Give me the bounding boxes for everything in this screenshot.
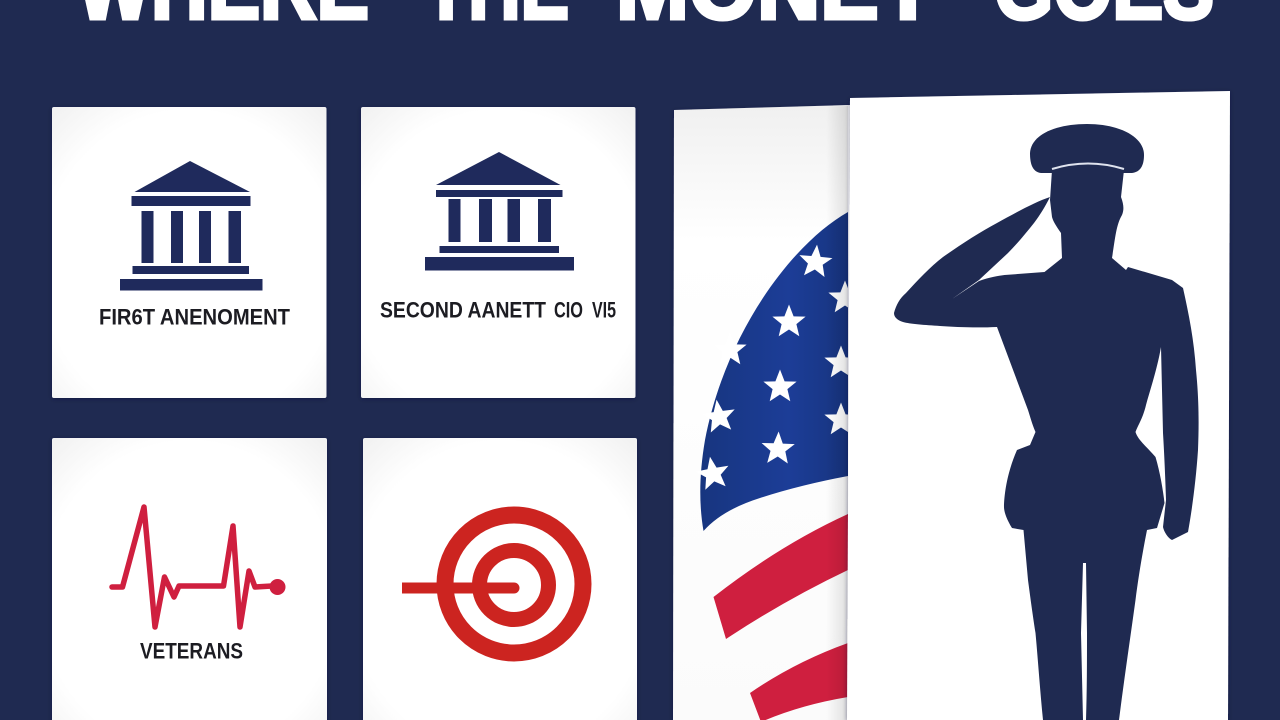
panel: soldier [847,91,1230,720]
icon: heartbeat [112,507,286,627]
flag stars [700,244,848,490]
panel: flag [673,105,862,720]
panel: target [363,438,637,720]
label: second amendment: SECOND AANETT [380,298,546,322]
flag canton [700,212,848,531]
icon: saluting soldier silhouette [894,124,1199,720]
label: second amendment: CIO [554,298,583,322]
soldier cap [1030,124,1144,173]
icon: target [402,515,583,653]
title [77,0,1214,38]
panel: first amendment [52,107,326,398]
icon: courthouse [120,161,262,290]
panel: veterans [52,438,327,720]
icon: courthouse [425,152,574,270]
soldier cap band [1052,164,1124,169]
label: veterans: VETERANS [140,638,243,664]
label: second amendment: VI5 [592,298,616,322]
soldier body [894,170,1199,720]
panel: second amendment [361,107,636,398]
flag stripes [714,514,848,720]
label: first amendment: FIR6T ANENOMENT [99,304,291,330]
icon: american flag [700,106,848,720]
